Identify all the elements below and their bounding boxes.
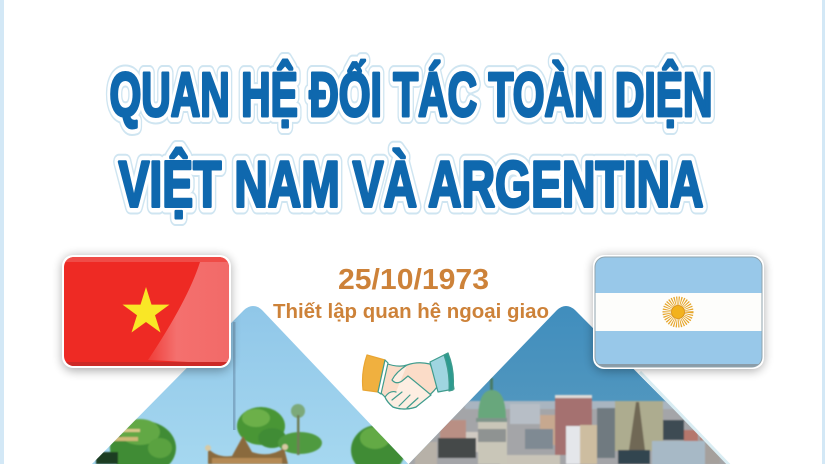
- photo: Buenos Aires skyline: [408, 306, 726, 464]
- flag pole: [233, 322, 236, 430]
- title pale outline: [110, 61, 712, 220]
- pagoda roof: [205, 436, 288, 464]
- flag shadow: [62, 256, 231, 371]
- title blue text: [110, 61, 712, 220]
- date: 25/10/1973: [338, 264, 489, 296]
- icon: handshake: [362, 353, 454, 409]
- title white halo: [110, 61, 712, 220]
- title: [110, 61, 712, 220]
- center tree: [237, 404, 322, 455]
- Argentina flag: [593, 255, 764, 371]
- flag star: [122, 287, 170, 332]
- right cuff: [430, 353, 454, 392]
- congress dome: [438, 378, 553, 464]
- photo edge highlight: [640, 372, 734, 464]
- pink tower: [555, 395, 597, 464]
- left cuff: [362, 355, 385, 392]
- beige building: [615, 401, 705, 464]
- Vietnam flag: [62, 255, 231, 371]
- hands: [378, 363, 439, 409]
- flag shadow: [593, 256, 764, 371]
- left tree: [96, 419, 176, 464]
- distant city: [395, 401, 740, 464]
- subtitle: Thiết lập quan hệ ngoại giao: [273, 301, 549, 323]
- right tree: [351, 425, 405, 464]
- sun of May: [667, 301, 689, 323]
- photo: Vietnam One Pillar Pagoda: [92, 306, 408, 464]
